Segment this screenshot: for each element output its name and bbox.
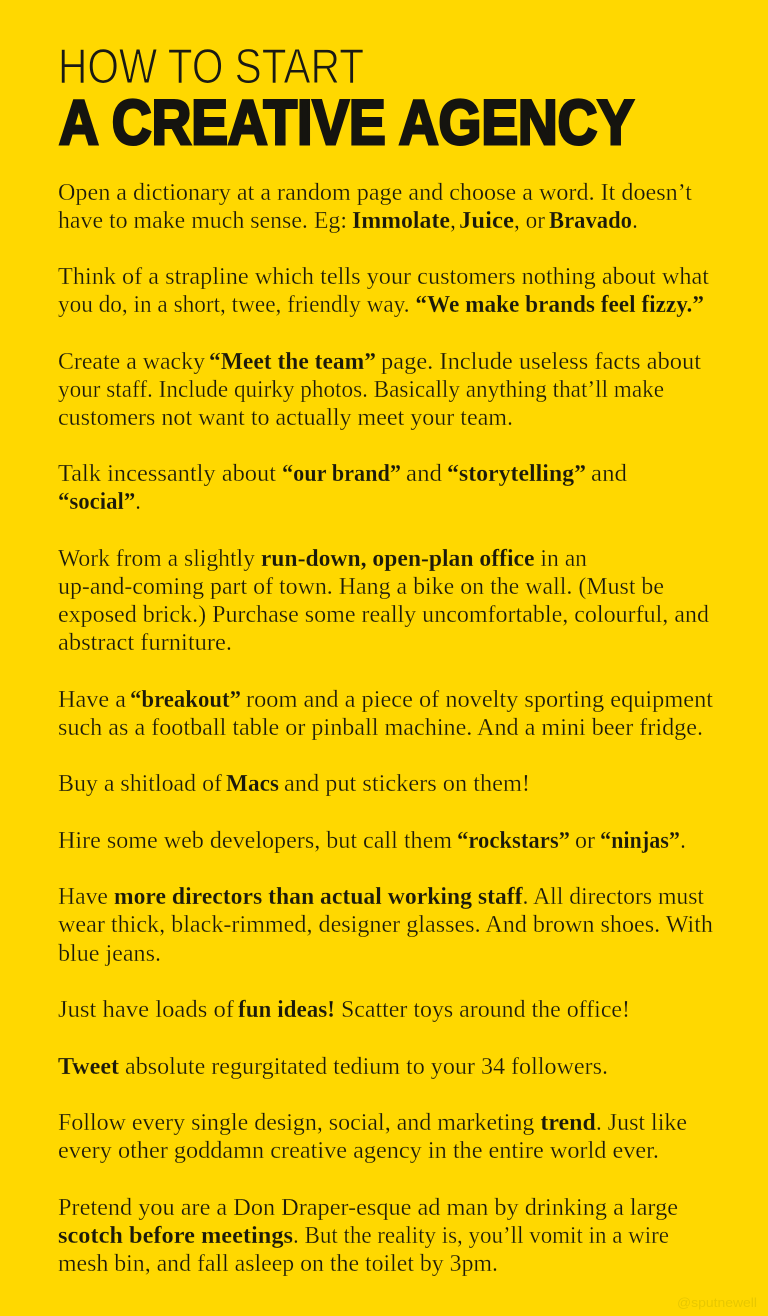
paragraph: dictionary: Bravado	[549, 208, 632, 234]
paragraph: don draper: . But the reality is, you’ll vomit in a wire	[293, 1223, 669, 1249]
paragraph: don draper: mesh bin, and fall asleep on the toilet by 3pm.	[58, 1251, 498, 1277]
paragraph: office	[58, 546, 709, 656]
paragraph: trend	[58, 1110, 687, 1164]
paragraph: breakout room: “breakout”	[130, 687, 241, 713]
paragraph: trend: Follow every single design, social, and marketing trend. Just like	[58, 1110, 687, 1136]
paragraph: dictionary: ,	[450, 208, 456, 234]
paragraph: fun ideas: Scatter toys around the office!	[341, 997, 630, 1023]
paragraph: developers: Hire some web developers, but call them	[58, 828, 452, 854]
paragraph: brand talk	[58, 461, 627, 515]
paragraph: dictionary: Juice	[459, 208, 514, 234]
paragraph: meet the team: “Meet the team”	[209, 349, 376, 375]
paragraph: meet the team: Create a wacky	[58, 349, 205, 375]
paragraph: fun ideas	[58, 997, 630, 1023]
watermark credit: @sputnewell	[677, 1295, 757, 1310]
paragraph: brand talk: “our brand”	[282, 461, 401, 487]
paragraph: office: up-and-coming part of town. Hang a bike on the wall. (Must be	[58, 574, 664, 600]
paragraph: developers	[58, 828, 686, 854]
paragraph: dictionary: .	[632, 208, 638, 234]
paragraph: brand talk: and	[406, 461, 442, 487]
paragraph: dictionary: have to make much sense. Eg:	[58, 208, 347, 234]
paragraph: brand talk: “social”.	[58, 489, 141, 515]
paragraph: directors: Have more directors than actual working staff. All directors must	[58, 884, 704, 910]
paragraph: don draper: Pretend you are a Don Draper-esque ad man by drinking a large	[58, 1195, 678, 1221]
paragraph: don draper: scotch before meetings	[58, 1223, 293, 1249]
paragraph: meet the team: your staff. Include quirky photos. Basically anything that’ll make	[58, 377, 664, 403]
paragraph: macs: Macs	[226, 771, 279, 797]
paragraph: meet the team	[58, 349, 701, 431]
paragraph: don draper	[58, 1195, 678, 1277]
title line: heavy: A CREATIVE AGENCY	[59, 88, 634, 158]
paragraph: tweet: Tweet absolute regurgitated tedium to your 34 followers.	[58, 1054, 608, 1080]
paragraph: dictionary	[58, 180, 692, 234]
paragraph: dictionary: , or	[514, 208, 545, 234]
paragraph: strapline: Think of a strapline which tells your customers nothing about what	[58, 264, 709, 290]
paragraph: macs: Buy a shitload of	[58, 771, 222, 797]
title	[58, 40, 634, 158]
paragraph: dictionary: Open a dictionary at a random page and choose a word. It doesn’t	[58, 180, 692, 206]
paragraph: developers: .	[680, 828, 686, 854]
paragraph: directors: wear thick, black-rimmed, designer glasses. And brown shoes. With	[58, 912, 713, 938]
paragraph: macs: and put stickers on them!	[284, 771, 530, 797]
paragraph: breakout room: Have a	[58, 687, 126, 713]
paragraph: fun ideas: Just have loads of	[58, 997, 234, 1023]
paragraph: dictionary: Immolate	[352, 208, 450, 234]
paragraph: macs	[58, 771, 530, 797]
paragraph: office: abstract furniture.	[58, 630, 232, 656]
paragraph: meet the team: page. Include useless facts about	[381, 349, 701, 375]
body copy	[58, 180, 713, 1277]
paragraph: directors: blue jeans.	[58, 941, 161, 967]
paragraph: strapline	[58, 264, 709, 318]
paragraph: breakout room: such as a football table or pinball machine. And a mini beer fridge.	[58, 715, 703, 741]
paragraph: brand talk: and	[591, 461, 627, 487]
title line: light: HOW TO START	[58, 40, 364, 94]
paragraph: directors	[58, 884, 713, 967]
paragraph: brand talk: “storytelling”	[447, 461, 586, 487]
paragraph: office: Work from a slightly run-down, open-plan office in an	[58, 546, 587, 572]
paragraph: meet the team: customers not want to actually meet your team.	[58, 405, 513, 431]
paragraph: brand talk: Talk incessantly about	[58, 461, 276, 487]
paragraph: developers: “ninjas”	[600, 828, 680, 854]
paragraph: strapline: you do, in a short, twee, friendly way. “We make brands feel fizzy.”	[58, 292, 704, 318]
paragraph: office: exposed brick.) Purchase some really uncomfortable, colourful, and	[58, 602, 709, 628]
paragraph: breakout room	[58, 687, 713, 741]
paragraph: fun ideas: fun ideas!	[238, 997, 335, 1023]
paragraph: breakout room: room and a piece of novelty sporting equipment	[246, 687, 713, 713]
paragraph: trend: every other goddamn creative agency in the entire world ever.	[58, 1138, 659, 1164]
paragraph: developers: “rockstars”	[457, 828, 570, 854]
paragraph: developers: or	[575, 828, 595, 854]
